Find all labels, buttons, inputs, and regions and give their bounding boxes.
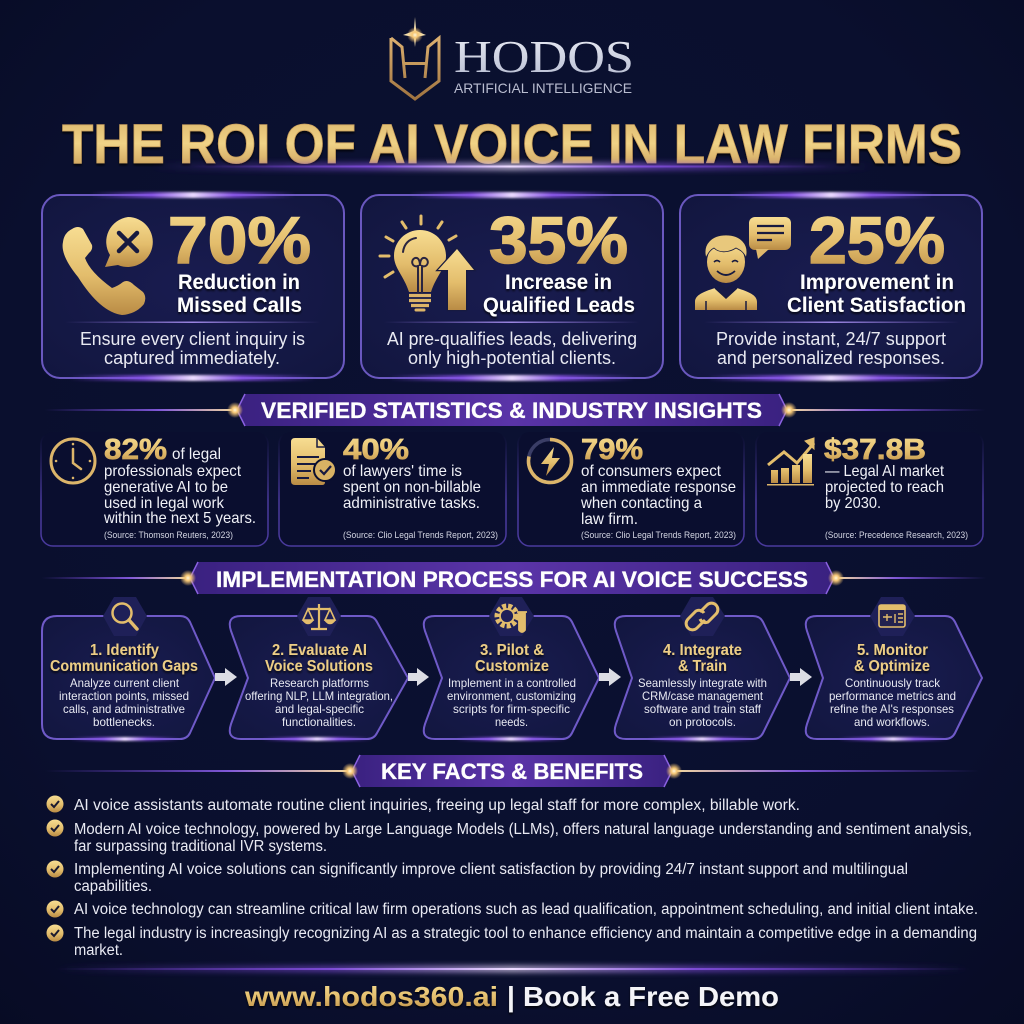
step description: and workflows. — [854, 715, 930, 729]
fact 5 — [46, 924, 977, 959]
stat text: administrative tasks. — [343, 495, 480, 512]
footer call to action: www.hodos360.ai — [244, 981, 498, 1012]
stat label: Improvement in — [800, 271, 954, 294]
stat text: within the next 5 years. — [103, 510, 256, 527]
stat text: generative AI to be — [104, 479, 228, 496]
step description: Continuously track — [845, 676, 941, 690]
step description: and legal-specific — [275, 702, 364, 716]
stat label — [787, 271, 966, 317]
step description: bottlenecks. — [93, 715, 155, 729]
step title: & Train — [678, 658, 727, 675]
step title: Communication Gaps — [50, 658, 198, 675]
step description: scripts for firm-specific — [453, 702, 570, 716]
step title: 5. Monitor — [857, 642, 928, 659]
stat text: of legal — [172, 446, 221, 463]
panel: 25% improvement in client satisfaction — [680, 192, 982, 381]
stat text: law firm. — [581, 511, 638, 528]
stat label: Missed Calls — [177, 294, 302, 317]
step description: Analyze current client — [70, 676, 180, 690]
fact 2: far surpassing traditional IVR systems. — [74, 838, 327, 855]
step description: interaction points, missed — [59, 689, 189, 703]
step title: 4. Integrate — [663, 642, 742, 659]
stat label — [177, 271, 302, 317]
stat card: 40% — [279, 432, 506, 546]
icon: shield monogram with star — [391, 17, 439, 99]
icon: gear and test tube in hexagon — [489, 597, 534, 636]
footer call to action: Book a Free Demo — [523, 981, 779, 1012]
step description: software and train staff — [644, 702, 762, 716]
step description: Seamlessly integrate with — [638, 676, 767, 690]
stat text: 79% — [581, 434, 643, 466]
step title: 1. Identify — [90, 642, 159, 659]
source: (Source: Clio Legal Trends Report, 2023) — [343, 530, 498, 541]
description: and personalized responses. — [717, 348, 945, 368]
section heading: implementation process — [42, 562, 986, 594]
stat text — [824, 434, 944, 512]
panel: 35% increase in qualified leads — [361, 192, 663, 381]
process step 4: integrate and train — [615, 597, 790, 741]
stat value: 35% — [489, 203, 628, 277]
step title: & Optimize — [854, 658, 930, 675]
stat text — [103, 434, 256, 527]
stat card: 82% — [41, 432, 268, 546]
list: key facts — [46, 796, 978, 959]
stat text — [343, 434, 481, 512]
icon: smiling client with chat bubble — [695, 217, 791, 310]
stat label: Client Satisfaction — [787, 294, 966, 317]
arrow: step 4 to 5 — [790, 668, 812, 686]
step title: 3. Pilot & — [480, 642, 544, 659]
stat card: $37.8B — [756, 432, 983, 546]
description: Provide instant, 24/7 support — [716, 329, 946, 349]
step title: 2. Evaluate AI — [272, 642, 367, 659]
stat value: 70% — [168, 203, 311, 277]
title glow line — [150, 163, 874, 170]
stat text: projected to reach — [825, 479, 944, 496]
section heading: implementation process: IMPLEMENTATION PROCESS FOR AI VOICE SUCCESS — [216, 567, 808, 592]
step description: performance metrics and — [829, 689, 956, 703]
stat text: of lawyers' time is — [343, 463, 462, 480]
arrow: step 1 to 2 — [215, 668, 237, 686]
step description: Implement in a controlled — [448, 676, 576, 690]
step title — [475, 642, 549, 675]
step description: CRM/case management — [642, 689, 764, 703]
stat text: an immediate response — [581, 479, 736, 496]
section heading: key facts and benefits: KEY FACTS & BENEFITS — [381, 759, 643, 784]
step description: functionalities. — [282, 715, 356, 729]
step description: refine the AI's responses — [830, 702, 954, 716]
step title — [663, 642, 742, 675]
fact 5: The legal industry is increasingly recognizing AI as a strategic tool to enhance efficiency and maintain a competitive edge in a demanding — [74, 925, 977, 942]
process step 2: evaluate AI voice solutions — [230, 597, 408, 741]
footer call to action: | — [507, 981, 515, 1012]
fact 5: market. — [74, 942, 123, 959]
arrow: step 2 to 3 — [408, 668, 429, 686]
step description: Research platforms — [270, 676, 369, 690]
stat value: 25% — [809, 203, 945, 277]
description — [716, 329, 946, 368]
step description: environment, customizing — [447, 689, 576, 703]
step description — [447, 676, 576, 729]
fact 2: Modern AI voice technology, powered by Large Language Models (LLMs), offers natural language understanding and sentiment analysis, — [74, 821, 972, 838]
footer glow line — [55, 966, 970, 972]
step title — [50, 642, 198, 675]
stat text: of consumers expect — [581, 463, 722, 480]
icon: lightning progress ring — [528, 439, 572, 482]
logo wordmark: HODOS — [454, 31, 634, 82]
stat card: 79% — [518, 432, 744, 546]
description: Ensure every client inquiry is — [80, 329, 305, 349]
step description — [638, 676, 767, 729]
title: THE ROI OF AI VOICE IN LAW FIRMS — [62, 112, 962, 175]
step description: offering NLP, LLM integration, — [245, 689, 393, 703]
source: (Source: Precedence Research, 2023) — [825, 530, 968, 541]
section heading: verified statistics — [45, 394, 985, 426]
fact 3: capabilities. — [74, 878, 152, 895]
stat text: used in legal work — [104, 495, 225, 512]
step description: calls, and administrative — [63, 702, 185, 716]
description: captured immediately. — [104, 348, 280, 368]
step description — [829, 676, 956, 729]
arrow: step 3 to 4 — [599, 668, 621, 686]
fact 2 — [46, 820, 972, 855]
source: (Source: Thomson Reuters, 2023) — [104, 530, 233, 541]
description — [80, 329, 305, 368]
stat text — [580, 434, 736, 528]
stat label: Reduction in — [178, 271, 300, 294]
process step 5: monitor and optimize — [806, 597, 982, 741]
stat text: when contacting a — [580, 495, 702, 512]
stat text: $37.8B — [824, 434, 926, 466]
process step 3: pilot and customize — [424, 597, 599, 741]
stat label — [483, 271, 635, 317]
stat text: by 2030. — [825, 495, 881, 512]
icon: magnifier in hexagon — [103, 597, 147, 636]
icon: phone with missed call bubble — [63, 217, 153, 315]
logo tagline: ARTIFICIAL INTELLIGENCE — [454, 80, 632, 96]
step title: Voice Solutions — [265, 658, 373, 675]
step title — [265, 642, 373, 675]
step description: needs. — [495, 715, 528, 729]
description — [387, 329, 637, 368]
icon: growth chart — [767, 438, 814, 486]
fact 3: Implementing AI voice solutions can significantly improve client satisfaction by providing 24/7 instant support and multilingual — [74, 861, 908, 878]
stat text: 82% — [104, 434, 167, 466]
section heading: verified statistics: VERIFIED STATISTICS & INDUSTRY INSIGHTS — [261, 398, 762, 423]
stat text: spent on non-billable — [343, 479, 481, 496]
section heading: key facts and benefits — [45, 755, 979, 787]
step title — [854, 642, 930, 675]
icon: light bulb with up arrow — [380, 216, 474, 310]
stat text: 40% — [343, 434, 409, 466]
process step 1: identify communication gaps — [42, 597, 215, 741]
step title: Customize — [475, 658, 549, 675]
description: AI pre-qualifies leads, delivering — [387, 329, 637, 349]
stat label: Qualified Leads — [483, 294, 635, 317]
panel: 70% reduction in missed calls — [42, 192, 344, 381]
icon: document with check — [291, 438, 336, 485]
icon: scales of justice in hexagon — [297, 597, 341, 636]
stat text: professionals expect — [104, 463, 242, 480]
fact 1: AI voice assistants automate routine client inquiries, freeing up legal staff for more complex, billable work. — [74, 797, 800, 814]
step description — [59, 676, 189, 729]
stat text: — Legal AI market — [825, 463, 944, 480]
stat label: Increase in — [505, 271, 612, 294]
icon: clock — [51, 439, 95, 483]
logo: Hodos — [391, 17, 634, 99]
step description — [245, 676, 393, 729]
source: (Source: Clio Legal Trends Report, 2023) — [581, 530, 736, 541]
fact 3 — [46, 860, 908, 895]
step description: on protocols. — [669, 715, 736, 729]
fact 4: AI voice technology can streamline critical law firm operations such as lead qualification, appointment scheduling, and initial client intake. — [74, 901, 978, 918]
icon: chain link in hexagon — [680, 597, 725, 636]
footer call to action — [244, 981, 779, 1012]
icon: dashboard window in hexagon — [870, 597, 915, 636]
description: only high-potential clients. — [408, 348, 616, 368]
